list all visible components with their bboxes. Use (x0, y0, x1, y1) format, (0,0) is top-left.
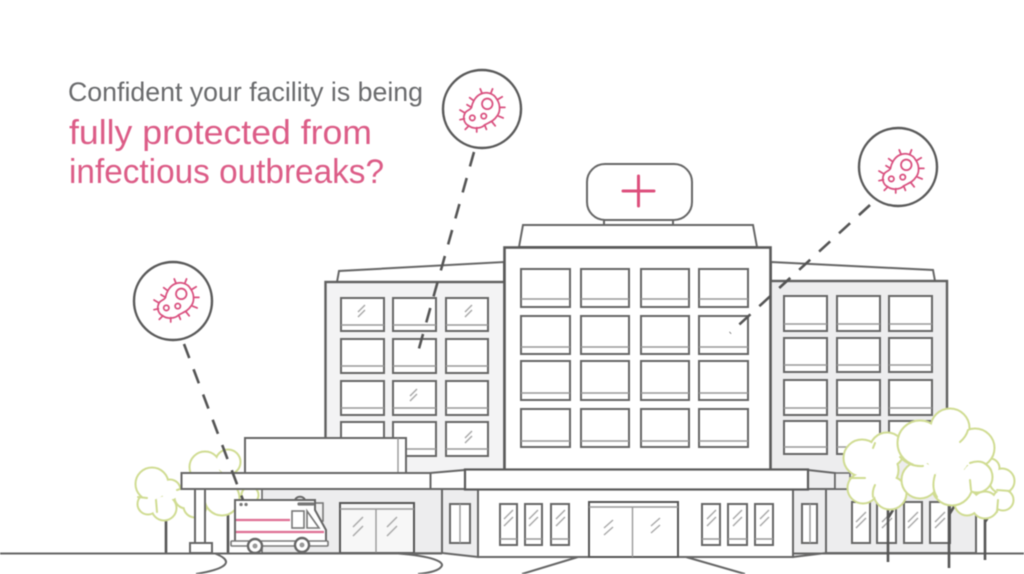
entrance canopy (182, 438, 850, 553)
centre roof (519, 225, 757, 247)
canopy right connector (808, 470, 835, 489)
entrance wall (478, 489, 793, 557)
left wing windows (341, 298, 488, 456)
left wing wall (326, 282, 504, 477)
right side bay (793, 489, 826, 557)
pink stripes (236, 520, 324, 532)
icon: bacteria (154, 279, 199, 322)
side window (292, 511, 304, 528)
canopy main band (465, 470, 808, 490)
left side bay (442, 489, 478, 557)
heading (68, 77, 423, 191)
rear box (312, 503, 323, 521)
heading line: pink 1: fully protected from (69, 114, 372, 152)
garage wall (262, 489, 442, 553)
roof lights (241, 502, 313, 506)
right lower windows (852, 502, 950, 543)
dashed pointer: tower (730, 205, 870, 333)
heading line: pink 2: infectious outbreaks? (69, 153, 384, 191)
marker: left wing bacteria (443, 70, 521, 148)
rooftop sign (587, 164, 692, 226)
right lower wing (808, 489, 976, 553)
left garage block (262, 489, 442, 553)
road edges (522, 557, 745, 574)
wheels (248, 539, 262, 553)
ambulance body (235, 500, 326, 543)
marker: left bacteria (134, 262, 212, 340)
ground and road (0, 554, 1024, 574)
ground line (0, 552, 1024, 554)
column base (190, 543, 212, 553)
centre tower windows (521, 269, 748, 447)
sign legs (604, 219, 673, 226)
right wing roof (771, 262, 935, 281)
canopy upper block (245, 438, 406, 473)
canopy left connector (430, 470, 465, 489)
centre tower (504, 248, 770, 470)
bay windows (450, 504, 817, 543)
garage door (340, 503, 414, 553)
dashed pointer: left wing (418, 152, 474, 352)
entrance windows (500, 504, 773, 545)
canopy left band (182, 473, 430, 489)
right lower wall (808, 489, 976, 553)
icon: bacteria (460, 89, 505, 132)
driveway curves (196, 554, 442, 574)
centre tower wall (504, 248, 770, 470)
sign box (587, 164, 692, 220)
right wing wall (770, 281, 947, 481)
left wing (326, 262, 504, 477)
tree trunks (888, 500, 989, 568)
bumper (231, 541, 328, 546)
tree canopies (844, 409, 1014, 518)
ambulance (231, 497, 328, 553)
left background trees (136, 450, 258, 553)
medical cross (623, 176, 654, 206)
left wing roof (337, 262, 504, 282)
windshield (307, 511, 319, 528)
heading line: grey: Confident your facility is being (68, 77, 423, 107)
marker: tower bacteria (859, 128, 937, 206)
main entrance (442, 489, 826, 557)
right foreground trees (844, 409, 1014, 568)
icon: bacteria (879, 150, 924, 193)
entrance door (589, 502, 678, 557)
right wing (770, 262, 947, 481)
beacon (295, 497, 305, 500)
canopy column (195, 489, 205, 543)
right wing windows (784, 296, 932, 454)
dashed pointer: ambulance (184, 344, 243, 500)
